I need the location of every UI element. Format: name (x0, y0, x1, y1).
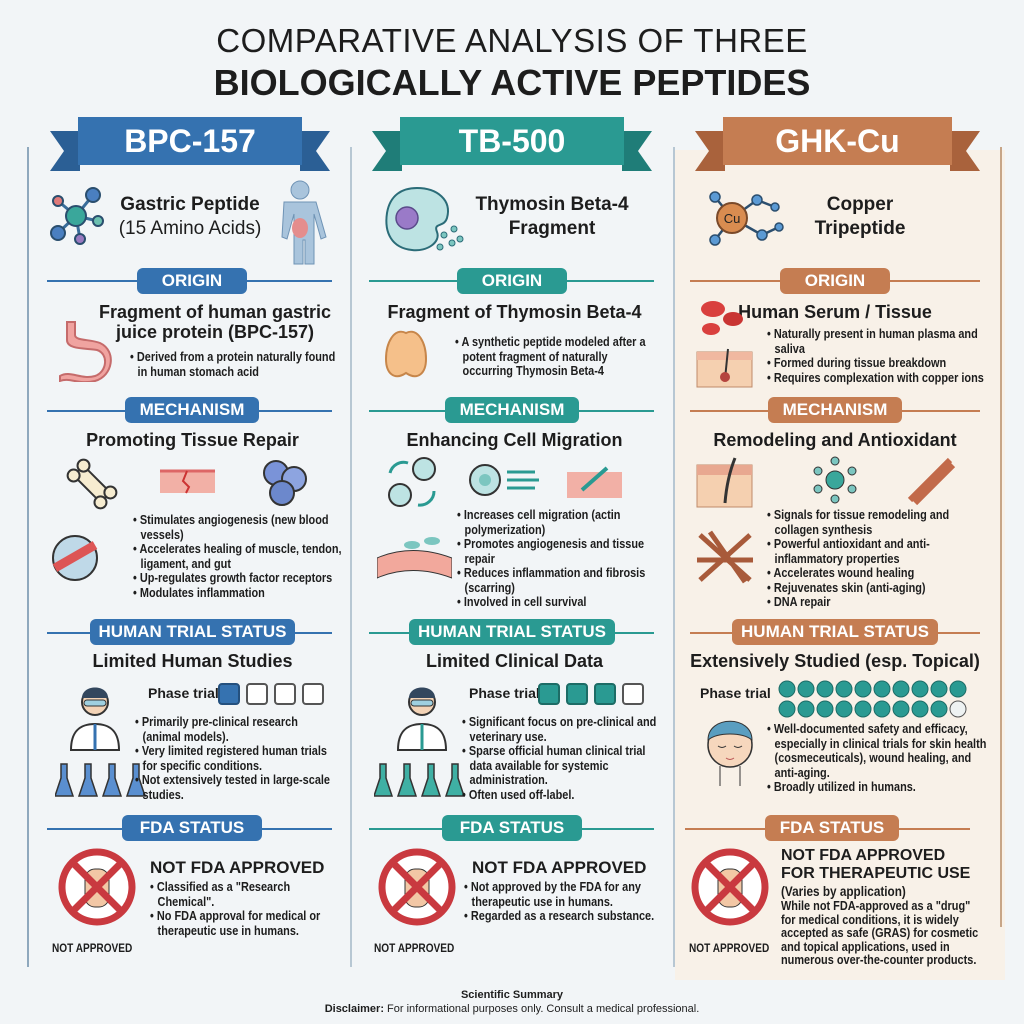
banner: GHK-Cu (775, 123, 900, 159)
icon: stomach (59, 321, 112, 382)
icon: copper complex: Cu (724, 211, 740, 226)
panel: GHK-Cu (685, 117, 986, 967)
header text: Gastric Peptide (120, 194, 260, 215)
panel: TB-500: Limited Clinical Data (426, 651, 603, 671)
section: human trial (47, 632, 332, 634)
panel: GHK-Cu: Phase trial (700, 685, 771, 701)
icon: prohibited hand (378, 848, 456, 926)
panel: TB-500: NOT APPROVED (374, 941, 454, 955)
banner (695, 117, 980, 171)
footer: Scientific Summary (461, 989, 563, 1001)
panel: BPC-157: NOT FDA APPROVED (150, 858, 324, 877)
icon: scientist (70, 688, 120, 751)
section: mechanism (690, 410, 980, 412)
panel: TB-500: ORIGIN (482, 271, 542, 290)
panel: TB-500 (369, 117, 656, 955)
panel: TB-500: Enhancing Cell Migration (406, 430, 622, 450)
panel: BPC-157: juice protein (BPC-157) (116, 322, 314, 342)
panel: TB-500: A synthetic peptide modeled after a potent fragment of naturally occurring Thymosin Beta-4 (461, 334, 646, 378)
panel: GHK-Cu: NOT APPROVED (689, 941, 769, 955)
panel: GHK-Cu: Broadly utilized in humans. (774, 779, 916, 794)
section: human trial (690, 632, 980, 634)
panel: GHK-Cu: Remodeling and Antioxidant (713, 430, 957, 450)
panel: GHK-Cu: MECHANISM (783, 400, 887, 419)
panel: GHK-Cu: HUMAN TRIAL STATUS (741, 622, 929, 641)
panel: TB-500: Phase trial (469, 685, 540, 701)
panel: BPC-157: Accelerates healing of muscle, tendon, ligament, and gut (139, 541, 342, 570)
panel: GHK-Cu: Naturally present in human plasma and saliva (774, 326, 978, 356)
header text (475, 194, 629, 239)
icon: thymus (385, 330, 427, 378)
column 3 background (675, 150, 1005, 980)
panel: GHK-Cu: Powerful antioxidant and anti-inflammatory properties (774, 536, 930, 566)
panel: BPC-157 (47, 117, 342, 955)
panel: GHK-Cu: Requires complexation with copper ions (774, 370, 984, 384)
FDA text: FOR THERAPEUTIC USE (781, 865, 970, 882)
header text: Fragment (509, 218, 595, 239)
phase boxes (218, 683, 324, 705)
FDA text: While not FDA-approved as a "drug" for medical conditions, it is widely accepted as safe (GRAS) for cosmetic and topical applications, used in numerous over-the-counter products. (781, 898, 978, 967)
section: FDA (47, 828, 332, 830)
panel: TB-500: Fragment of Thymosin Beta-4 (387, 302, 642, 322)
phase boxes (538, 683, 644, 705)
panel: BPC-157: Very limited registered human trials for specific conditions. (142, 743, 327, 772)
icon: prohibited hand (58, 848, 136, 926)
footer (325, 989, 699, 1015)
panel: TB-500: MECHANISM (460, 400, 564, 419)
panel: TB-500: Increases cell migration (actin polymerization) (464, 507, 620, 536)
section: origin (47, 280, 332, 282)
section: human trial (369, 632, 654, 634)
header text (119, 194, 261, 239)
panel: TB-500: NOT FDA APPROVED (472, 858, 646, 877)
section: origin (690, 280, 980, 282)
section: mechanism (47, 410, 332, 412)
panel: BPC-157: Classified as a "Research Chemical". (157, 879, 290, 908)
panel: BPC-157: Fragment of human gastric (99, 302, 331, 322)
panel: BPC-157: ORIGIN (162, 271, 222, 290)
title: BIOLOGICALLY ACTIVE PEPTIDES (214, 62, 810, 103)
panel: GHK-Cu: Well-documented safety and efficacy, especially in clinical trials for skin health (cosmeceuticals), wound healing, and anti-aging. (774, 721, 986, 780)
panel: BPC-157: Limited Human Studies (92, 651, 293, 671)
icon: face (707, 720, 753, 786)
icon: blood cells & skin (696, 301, 752, 388)
panel: GHK-Cu: Accelerates wound healing (773, 565, 914, 580)
FDA text: (Varies by application) (781, 883, 906, 899)
panel: TB-500: Often used off-label. (469, 786, 574, 802)
header text: Tripeptide (815, 218, 905, 239)
panel: GHK-Cu: Rejuvenates skin (anti-aging) (774, 580, 926, 594)
panel: BPC-157: Up-regulates growth factor receptors (140, 570, 332, 585)
panel: BPC-157: NOT APPROVED (52, 941, 132, 955)
panel: BPC-157: No FDA approval for medical or therapeutic use in humans. (157, 908, 320, 938)
panel: BPC-157: Modulates inflammation (140, 584, 265, 600)
panel: TB-500: Reduces inflammation and fibrosis (scarring) (464, 565, 645, 594)
panel: BPC-157: Promoting Tissue Repair (86, 430, 299, 450)
icon: copper complex (709, 191, 784, 246)
panel: BPC-157: FDA STATUS (140, 818, 244, 837)
icon: prohibited hand (692, 848, 768, 926)
title: COMPARATIVE ANALYSIS OF THREE (216, 22, 808, 59)
header text: (15 Amino Acids) (119, 218, 261, 239)
panel: TB-500: FDA STATUS (460, 818, 564, 837)
panel: GHK-Cu: ORIGIN (805, 271, 865, 290)
title (214, 22, 810, 103)
icons: remodeling (696, 456, 955, 584)
banner: TB-500 (459, 123, 565, 159)
panel: BPC-157: Primarily pre-clinical research (animal models). (142, 714, 298, 744)
icon: cell (385, 187, 464, 252)
icon: molecule (50, 187, 104, 245)
panel: TB-500: HUMAN TRIAL STATUS (418, 622, 606, 641)
icon: human body (282, 180, 327, 264)
panel: BPC-157: Derived from a protein naturally found in human stomach acid (137, 349, 335, 378)
section: origin (369, 280, 654, 282)
FDA text (781, 847, 978, 967)
section: FDA (369, 828, 654, 830)
panel: GHK-Cu: DNA repair (774, 594, 831, 609)
header text: Thymosin Beta-4 (475, 194, 629, 215)
panel: BPC-157: Phase trial (148, 685, 219, 701)
panel: TB-500: Involved in cell survival (464, 594, 586, 609)
icon: scientist (397, 688, 447, 751)
panel: GHK-Cu: Formed during tissue breakdown (774, 355, 946, 370)
panel: BPC-157: MECHANISM (140, 400, 244, 419)
banner: BPC-157 (124, 123, 256, 159)
section: mechanism (369, 410, 654, 412)
phase dots (778, 680, 966, 718)
panel: GHK-Cu: Extensively Studied (esp. Topical) (690, 651, 980, 671)
panel: TB-500: Regarded as a research substance. (471, 908, 654, 923)
icon: flasks (55, 763, 146, 797)
icons: migration (377, 457, 622, 578)
section: FDA (685, 828, 970, 830)
icons: repair (52, 458, 307, 581)
panel: BPC-157: Stimulates angiogenesis (new blood vessels) (140, 512, 329, 542)
panel: TB-500: Not approved by the FDA for any therapeutic use in humans. (471, 879, 641, 908)
header text: Copper (827, 194, 893, 215)
panel: GHK-Cu: FDA STATUS (780, 818, 884, 837)
banner (50, 117, 330, 171)
panel: BPC-157: Not extensively tested in large-scale studies. (142, 772, 330, 802)
panel: GHK-Cu: Signals for tissue remodeling and collagen synthesis (774, 507, 949, 536)
panel: TB-500: Significant focus on pre-clinical and veterinary use. (469, 714, 656, 744)
icon: flasks (374, 763, 465, 797)
footer: Disclaimer: For informational purposes only. Consult a medical professional. (325, 1003, 699, 1015)
header text (814, 194, 905, 239)
panel: TB-500: Sparse official human clinical trial data available for systemic administration. (469, 743, 645, 787)
FDA text: NOT FDA APPROVED (781, 847, 945, 864)
banner (372, 117, 652, 171)
panel: TB-500: Promotes angiogenesis and tissue repair (464, 536, 644, 566)
panel: BPC-157: HUMAN TRIAL STATUS (99, 622, 286, 641)
panel: GHK-Cu: Human Serum / Tissue (738, 302, 932, 322)
